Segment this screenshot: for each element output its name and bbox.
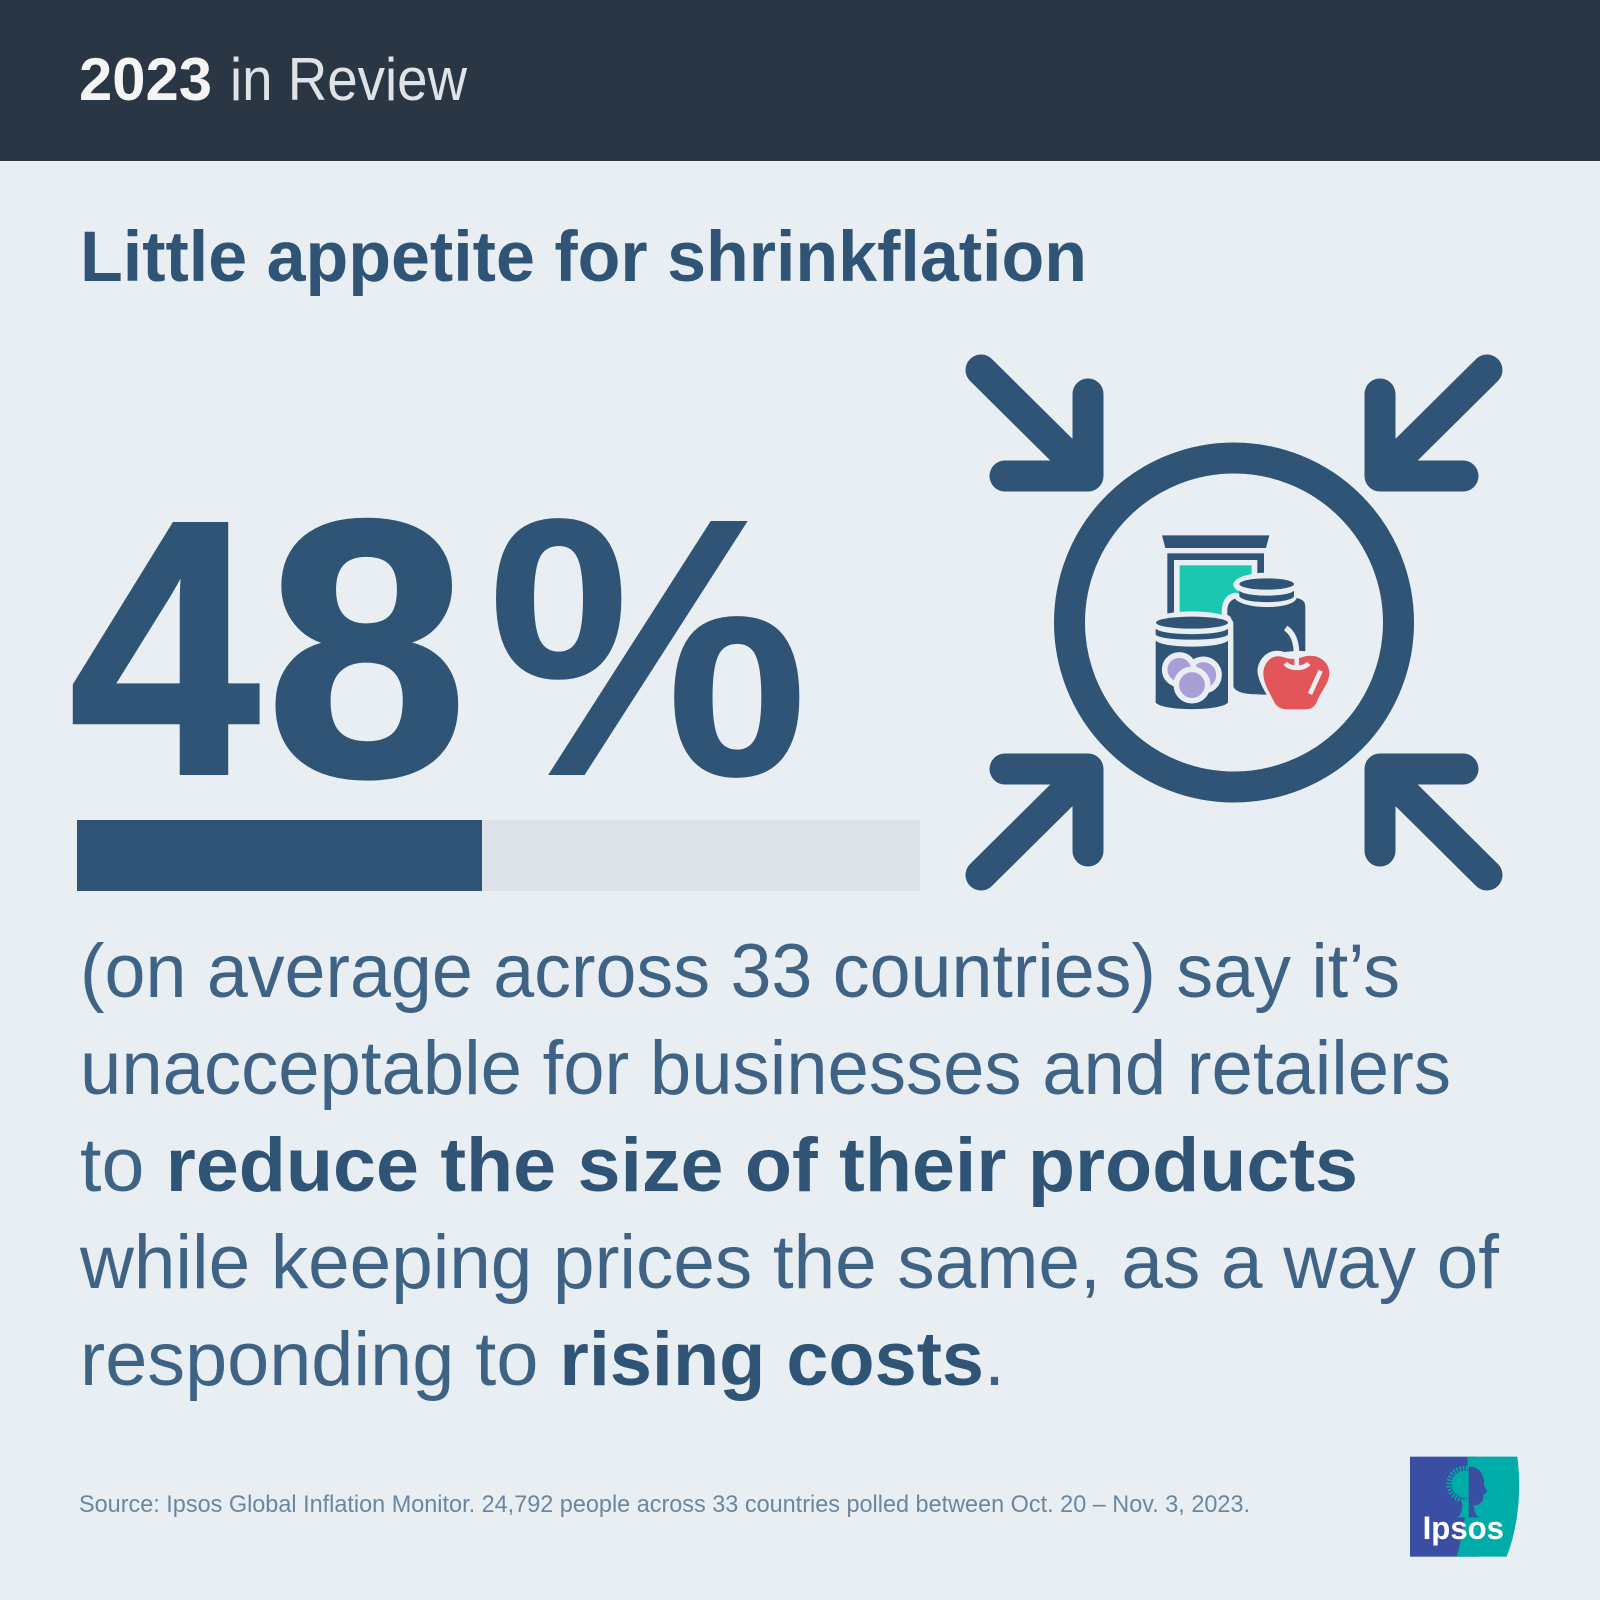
- header title: 2023: [79, 46, 212, 113]
- source note: Source: Ipsos Global Inflation Monitor. 24,792 people across 33 countries polled between Oct. 20 – Nov. 3, 2023.: [79, 1491, 1250, 1518]
- icon: ring: [1070, 458, 1398, 787]
- big statistic 48%: [70, 442, 809, 854]
- big statistic 48%: 4: [70, 445, 262, 850]
- line 5: responding to rising costs.: [80, 1317, 1005, 1402]
- header title: [79, 46, 468, 113]
- logo: tree and profile: [1449, 1467, 1487, 1517]
- heading: Little appetite for shrinkflation: [80, 218, 1087, 297]
- big statistic 48%: %: [487, 442, 809, 854]
- icon: jar: [1222, 573, 1305, 700]
- body text: [79, 929, 1500, 1402]
- line 2: unacceptable for businesses and retailers: [80, 1026, 1451, 1111]
- line 3: to reduce the size of their products: [80, 1123, 1358, 1208]
- icon: shrinking arrows around products: [981, 370, 1487, 875]
- icon: apple: [1258, 628, 1332, 713]
- icon: grocery products: [1151, 535, 1332, 713]
- line 4: while keeping prices the same, as a way of: [79, 1220, 1500, 1305]
- icon: can with berries: [1151, 611, 1233, 713]
- header title: in Review: [230, 46, 468, 113]
- logo: Ipsos: [1410, 1457, 1519, 1557]
- header band: [0, 0, 1600, 161]
- progress bar 48 percent: [77, 820, 920, 891]
- big statistic 48%: 8: [266, 445, 467, 853]
- logo: wordmark: Ipsos: [1423, 1510, 1504, 1546]
- icon: cereal box: [1162, 535, 1269, 622]
- icon: four inward arrows: [981, 370, 1487, 875]
- line 1: (on average across 33 countries) say it’s: [80, 929, 1400, 1014]
